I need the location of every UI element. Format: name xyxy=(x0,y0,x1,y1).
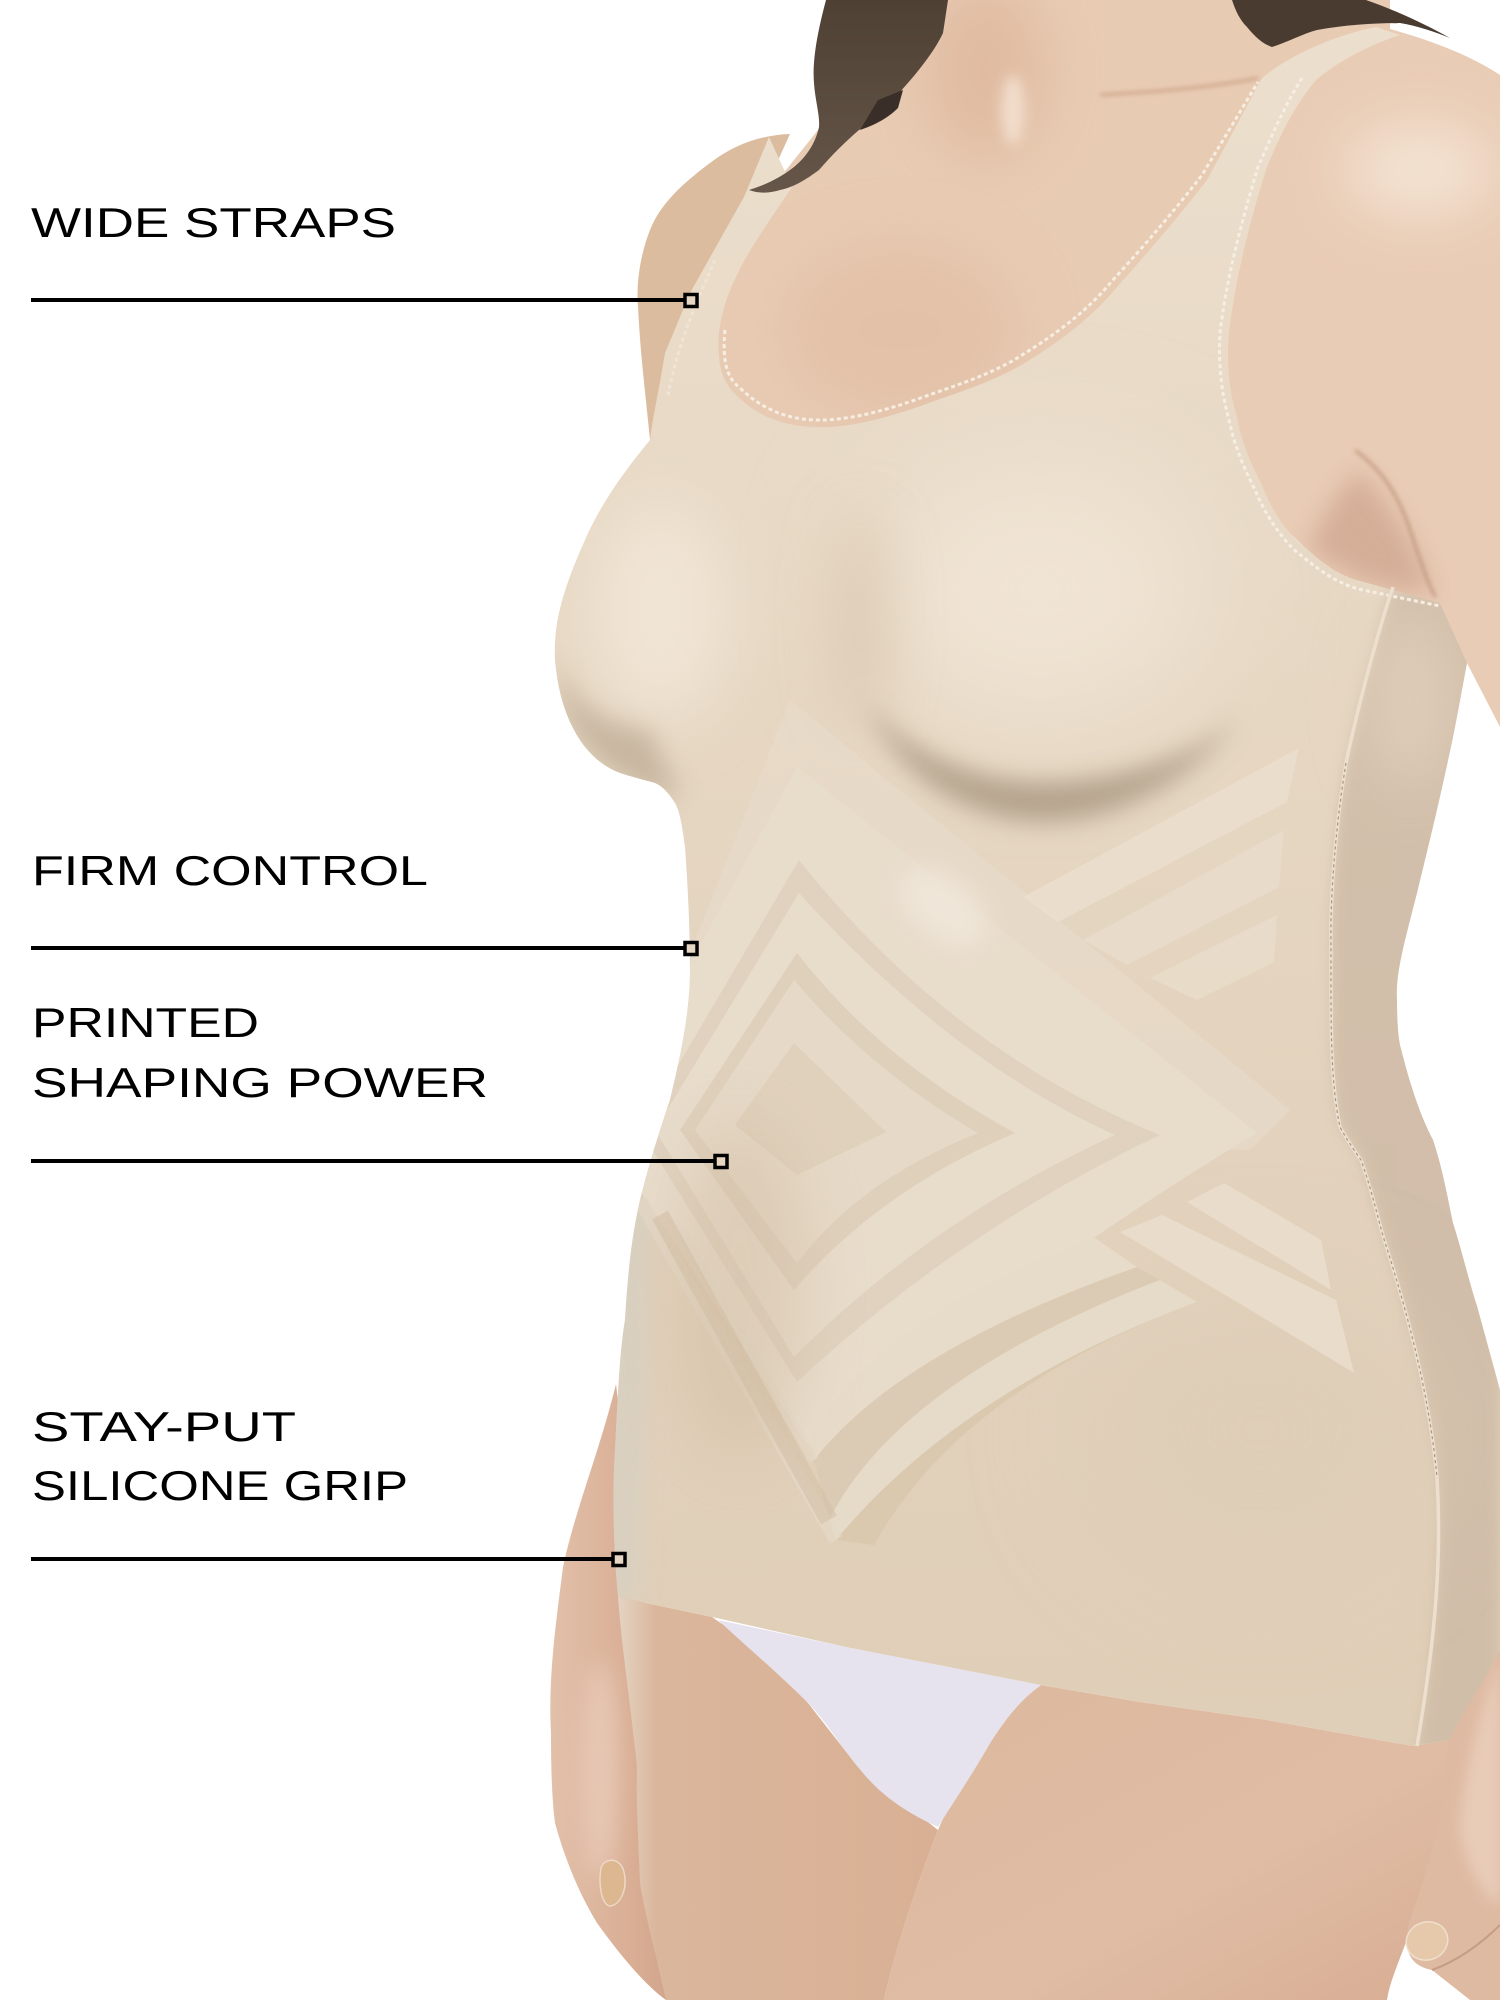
left arm and hand xyxy=(550,1384,700,2000)
label: stay-put silicone grip xyxy=(32,1403,408,1509)
lower right bars xyxy=(1187,1183,1331,1290)
upper right bars xyxy=(1023,748,1299,922)
chest and neck skin xyxy=(700,0,1390,480)
leader line and marker: stay-put silicone grip xyxy=(31,1554,625,1566)
callout: printed shaping power xyxy=(31,999,727,1168)
lower tonal shading xyxy=(672,1130,812,1432)
label: printed shaping power xyxy=(32,999,488,1106)
callout: firm control xyxy=(31,847,697,954)
fingernail xyxy=(600,1860,625,1906)
right thigh xyxy=(884,1685,1450,2000)
right hand xyxy=(1401,1640,1500,2000)
label: stay-put silicone grip: SILICONE GRIP xyxy=(32,1462,408,1509)
callout: wide straps xyxy=(31,199,697,306)
white brief xyxy=(718,1620,1041,1827)
hair xyxy=(749,0,1450,193)
under-bust shadow xyxy=(864,700,1242,822)
nested diamonds xyxy=(642,980,1229,1446)
right arm xyxy=(1215,29,1500,727)
label: printed shaping power: SHAPING POWER xyxy=(32,1059,488,1106)
thumbnail xyxy=(1401,1916,1453,1966)
photo: model wearing shaping camisole xyxy=(550,0,1500,2000)
leader line and marker: printed shaping power xyxy=(31,1156,727,1168)
leader line and marker: firm control xyxy=(31,942,697,954)
garment shading xyxy=(555,460,1500,1760)
callout: stay-put silicone grip xyxy=(31,1403,625,1566)
leader line and marker: wide straps xyxy=(31,294,697,306)
neckline and armhole stitching xyxy=(668,78,1440,606)
label: printed shaping power: PRINTED xyxy=(32,999,259,1046)
faint outer panel xyxy=(620,700,1290,1150)
label: stay-put silicone grip: STAY-PUT xyxy=(32,1403,296,1450)
label: firm control: FIRM CONTROL xyxy=(32,847,428,894)
side seam xyxy=(1331,587,1439,1746)
shaping camisole xyxy=(554,27,1500,1746)
lower chevron bands xyxy=(836,1324,1140,1545)
printed diamond shaping panels xyxy=(642,748,1354,1545)
left thigh xyxy=(618,1597,938,2000)
left shoulder xyxy=(638,134,790,440)
label: wide straps: WIDE STRAPS xyxy=(31,199,396,246)
